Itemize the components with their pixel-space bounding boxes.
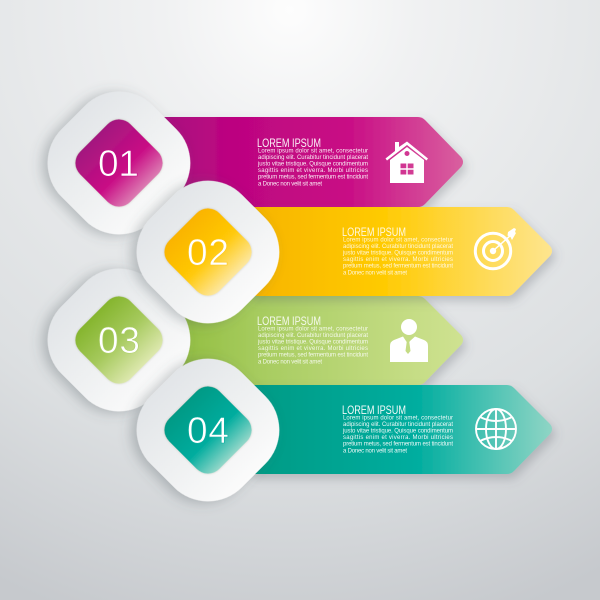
badge 04 inner diamond xyxy=(158,380,258,480)
body 3: a Donec non velit sit amet xyxy=(258,360,322,366)
text block 3 xyxy=(257,316,368,366)
heading 3: LOREM IPSUM xyxy=(257,316,321,328)
body 3: adipiscing elit. Curabitur tincidunt placerat xyxy=(258,333,368,339)
badge 04 xyxy=(117,339,299,521)
body 3: pretium metus, sed fermentum est tincidunt xyxy=(258,352,368,358)
badge 02 outer plate xyxy=(117,161,299,343)
text block 4 xyxy=(342,405,453,454)
panel: arrow bar 4 xyxy=(250,385,552,474)
badge 01 inner diamond xyxy=(69,113,169,213)
number 04: 04 xyxy=(187,410,229,451)
icon: globe xyxy=(476,409,516,449)
panel: arrow bar 3 xyxy=(164,296,463,385)
body 4: pretium metus, sed fermentum est tincidunt xyxy=(343,442,453,448)
body 1: sagittis enim et viverra. Morbi ultricies xyxy=(258,168,368,174)
body 2: justo vitae tristique. Quisque condimentum xyxy=(342,250,453,256)
panel: arrow bar 2 xyxy=(250,207,552,296)
icon: businessman xyxy=(390,319,428,362)
body 3: justo vitae tristique. Quisque condimentum xyxy=(257,340,368,346)
body 4: adipiscing elit. Curabitur tincidunt placerat xyxy=(343,422,453,428)
body 3 xyxy=(257,326,368,366)
badge 01 outer plate xyxy=(28,72,210,254)
body 2: adipiscing elit. Curabitur tincidunt placerat xyxy=(343,244,453,250)
number 01: 01 xyxy=(98,143,139,184)
body 2: a Donec non velit sit amet xyxy=(343,270,407,276)
body 4 xyxy=(342,416,453,454)
icon: house xyxy=(386,142,428,183)
badge 03 xyxy=(28,249,210,431)
body 2: Lorem ipsum dolor sit amet, consectetur xyxy=(343,238,453,244)
body 1: pretium metus, sed fermentum est tincidunt xyxy=(258,174,368,180)
body 2 xyxy=(342,238,453,276)
body 4: justo vitae tristique. Quisque condimentum xyxy=(342,428,453,434)
body 3: sagittis enim et viverra. Morbi ultricies xyxy=(258,346,368,352)
body 1: adipiscing elit. Curabitur tincidunt placerat xyxy=(258,155,368,161)
badge 04 outer plate xyxy=(117,339,299,521)
body 2: sagittis enim et viverra. Morbi ultricies xyxy=(343,257,453,263)
text block 2 xyxy=(342,227,453,276)
body 4: a Donec non velit sit amet xyxy=(343,448,407,454)
panel: arrow bar 1 xyxy=(164,117,463,207)
body 1: a Donec non velit sit amet xyxy=(258,182,322,188)
badge 02 inner diamond xyxy=(158,202,258,302)
body 1 xyxy=(257,148,368,188)
heading 1: LOREM IPSUM xyxy=(257,138,321,150)
icon: target xyxy=(475,228,516,269)
body 2: pretium metus, sed fermentum est tincidunt xyxy=(343,264,453,270)
body 4: Lorem ipsum dolor sit amet, consectetur xyxy=(343,416,453,422)
text block 1 xyxy=(257,138,368,188)
badge 03 inner diamond xyxy=(69,290,169,390)
badge 02 xyxy=(117,161,299,343)
number 02: 02 xyxy=(187,232,229,273)
body 1: justo vitae tristique. Quisque condimentum xyxy=(257,162,368,168)
number 03: 03 xyxy=(98,320,140,361)
heading 2: LOREM IPSUM xyxy=(342,227,406,239)
body 4: sagittis enim et viverra. Morbi ultricies xyxy=(343,435,453,441)
body 3: Lorem ipsum dolor sit amet, consectetur xyxy=(258,326,368,332)
badge 01 xyxy=(28,72,210,254)
badge 03 outer plate xyxy=(28,249,210,431)
heading 4: LOREM IPSUM xyxy=(342,405,406,417)
body 1: Lorem ipsum dolor sit amet, consectetur xyxy=(258,148,368,154)
